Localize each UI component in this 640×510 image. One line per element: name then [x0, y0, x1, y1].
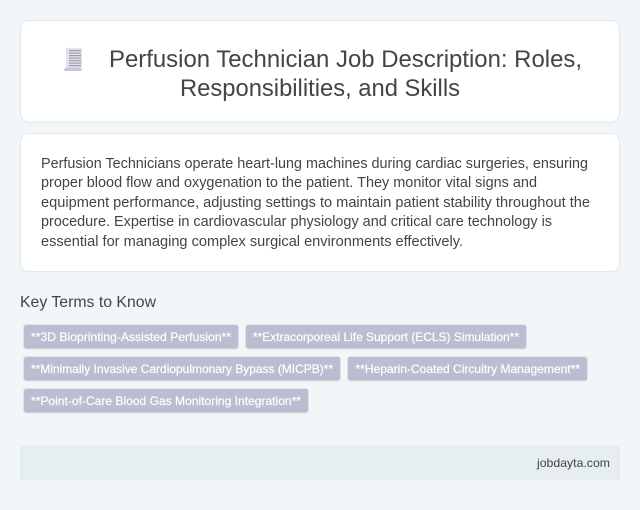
- chip: heparin-coated circuitry: [348, 356, 588, 381]
- description text: essential for managing complex surgical environments effectively.: [41, 234, 463, 250]
- icon: document scroll: [64, 48, 83, 71]
- title: Responsibilities, and Skills: [180, 75, 460, 102]
- chip: point-of-care monitoring: [24, 388, 308, 413]
- heading: key terms: Key Terms to Know: [20, 294, 156, 311]
- description text: proper blood flow and oxygenation to the patient. They monitor vital signs and: [41, 175, 537, 191]
- title: Perfusion Technician Job Description: Roles,: [109, 46, 582, 73]
- description text: equipment performance, adjusting settings to maintain patient stability throughout the: [41, 195, 590, 211]
- title: [109, 46, 582, 102]
- chip: MICPB: [24, 356, 340, 381]
- chip: ECLS simulation: **Extracorporeal Life Support (ECLS) Simulation**: [253, 330, 519, 344]
- chip: point-of-care monitoring: **Point-of-Care Blood Gas Monitoring Integration**: [31, 394, 301, 408]
- chip: 3D bioprinting: [24, 324, 238, 349]
- footer bar: [20, 446, 620, 480]
- description text: procedure. Expertise in cardiovascular physiology and critical care technology is: [41, 214, 552, 230]
- panel: title card: [20, 20, 620, 122]
- chip: heparin-coated circuitry: **Heparin-Coated Circuitry Management**: [356, 362, 580, 376]
- panel: description card: [20, 134, 620, 272]
- description text: [41, 156, 590, 250]
- chip: MICPB: **Minimally Invasive Cardiopulmonary Bypass (MICPB)**: [31, 362, 333, 376]
- description text: Perfusion Technicians operate heart-lung machines during cardiac surgeries, ensuring: [41, 156, 588, 172]
- chip: ECLS simulation: [246, 324, 526, 349]
- chip: 3D bioprinting: **3D Bioprinting-Assisted Perfusion**: [31, 330, 231, 344]
- footer source: jobdayta.com: [536, 456, 610, 470]
